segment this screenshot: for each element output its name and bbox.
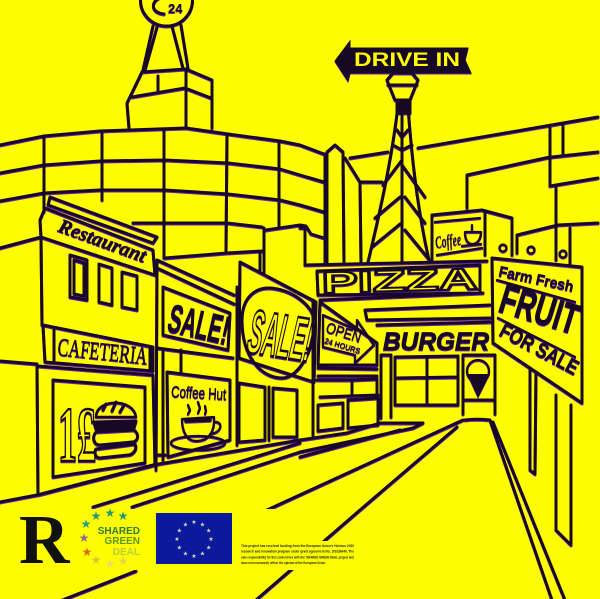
pizza sign: PIZZA bbox=[321, 263, 478, 300]
burger sign: BURGER bbox=[383, 328, 489, 356]
logo: shared green deal bbox=[79, 506, 140, 571]
sale sign: SALE! bbox=[164, 297, 233, 353]
logo: shared green deal: ★ bbox=[105, 506, 115, 520]
street scene illustration: SALE! bbox=[244, 298, 318, 376]
logo: EU flag: ★ bbox=[191, 553, 197, 560]
logo: EU flag: ★ bbox=[177, 544, 182, 552]
lower shop structure bbox=[313, 300, 378, 437]
logo: EU flag: ★ bbox=[206, 528, 211, 534]
logo: EU flag: ★ bbox=[174, 536, 180, 543]
ground floor windows bbox=[239, 383, 297, 442]
logo: EU flag: ★ bbox=[206, 544, 211, 552]
coffee box sign: Coffee bbox=[434, 229, 463, 252]
1 pound burger sign bbox=[38, 366, 155, 495]
logo: shared green deal: ★ bbox=[91, 553, 101, 567]
logo: shared green deal: ★ bbox=[82, 545, 92, 559]
restaurant sign: Restaurant bbox=[54, 215, 151, 268]
icon: burger bbox=[94, 402, 138, 458]
logo: EU flag: ★ bbox=[200, 551, 205, 558]
restaurant sign bbox=[40, 197, 157, 275]
left building facade grid bbox=[0, 128, 324, 495]
logo band background bbox=[0, 509, 322, 570]
right background buildings bbox=[325, 117, 598, 263]
1 pound burger sign: 1£ bbox=[58, 391, 96, 478]
logo: EU flag: ★ bbox=[191, 519, 197, 526]
logo: R: R bbox=[19, 502, 71, 579]
logo: shared green deal: ★ bbox=[91, 509, 101, 523]
open 24 hours arrow sign: OPEN bbox=[324, 320, 363, 346]
shop front panels bbox=[156, 287, 237, 460]
cafeteria sign bbox=[43, 325, 153, 371]
burger sign bbox=[365, 305, 490, 356]
funding disclaimer: sole responsibility for this content lies with the 'SHARED GREEN DEAL project and bbox=[241, 556, 354, 560]
logo: EU flag: ★ bbox=[208, 536, 214, 543]
logo: EU flag: ★ bbox=[183, 551, 188, 558]
coffee hut sign: Coffee Hut bbox=[171, 384, 227, 404]
logo: EU flag: ★ bbox=[200, 521, 205, 528]
farm fresh fruit billboard: Farm Fresh bbox=[497, 263, 575, 296]
logo: shared green deal: ★ bbox=[105, 557, 115, 571]
logo: shared green deal: DEAL bbox=[113, 547, 140, 558]
logo: shared green deal: ★ bbox=[118, 554, 128, 568]
open 24 hours arrow sign bbox=[318, 302, 377, 365]
logo: shared green deal: GREEN bbox=[104, 536, 140, 547]
farm fresh fruit billboard bbox=[492, 244, 585, 403]
drive in arrow sign bbox=[335, 41, 471, 81]
coffee box sign bbox=[432, 210, 512, 260]
ground and road lines bbox=[0, 419, 565, 599]
logo: shared green deal: ★ bbox=[118, 509, 128, 523]
funding disclaimer: does not necessarily reflect the opinion of the European Union. bbox=[241, 561, 326, 565]
funding disclaimer bbox=[241, 544, 354, 565]
sale sign bbox=[156, 260, 234, 470]
logo: shared green deal: ★ bbox=[79, 531, 89, 545]
pizza sign bbox=[300, 228, 487, 300]
funding disclaimer: This project has received funding from the European Union's Horizon 2020 bbox=[241, 544, 354, 548]
logo: EU flag: ★ bbox=[183, 521, 188, 528]
logo: EU flag bbox=[156, 513, 232, 564]
big oval sale sign bbox=[239, 262, 318, 382]
rooftop clock sign bbox=[140, 0, 192, 70]
billboard posts bbox=[530, 370, 571, 545]
farm fresh fruit billboard: FOR SALE bbox=[496, 319, 582, 380]
rooftop clock sign: 24 bbox=[168, 1, 183, 16]
ice cream sign bbox=[463, 355, 495, 414]
logo: shared green deal: ★ bbox=[81, 517, 91, 531]
rooftop block bbox=[127, 69, 212, 128]
logo: EU flag: ★ bbox=[177, 528, 182, 534]
coffee hut sign bbox=[167, 372, 230, 457]
drive in arrow sign: DRIVE IN bbox=[354, 50, 460, 71]
funding disclaimer: research and innovation program under grant agreement No. 101036640. The bbox=[241, 550, 354, 554]
restaurant windows bbox=[70, 255, 137, 310]
open 24 hours arrow sign: 24 HOURS bbox=[323, 336, 362, 356]
icon: coffee cup bbox=[171, 402, 225, 450]
burger shop windows bbox=[381, 355, 458, 418]
logo: shared green deal: SHARED bbox=[98, 526, 140, 537]
cafeteria sign: CAFETERIA bbox=[56, 334, 149, 370]
drive in tower bbox=[368, 73, 429, 262]
